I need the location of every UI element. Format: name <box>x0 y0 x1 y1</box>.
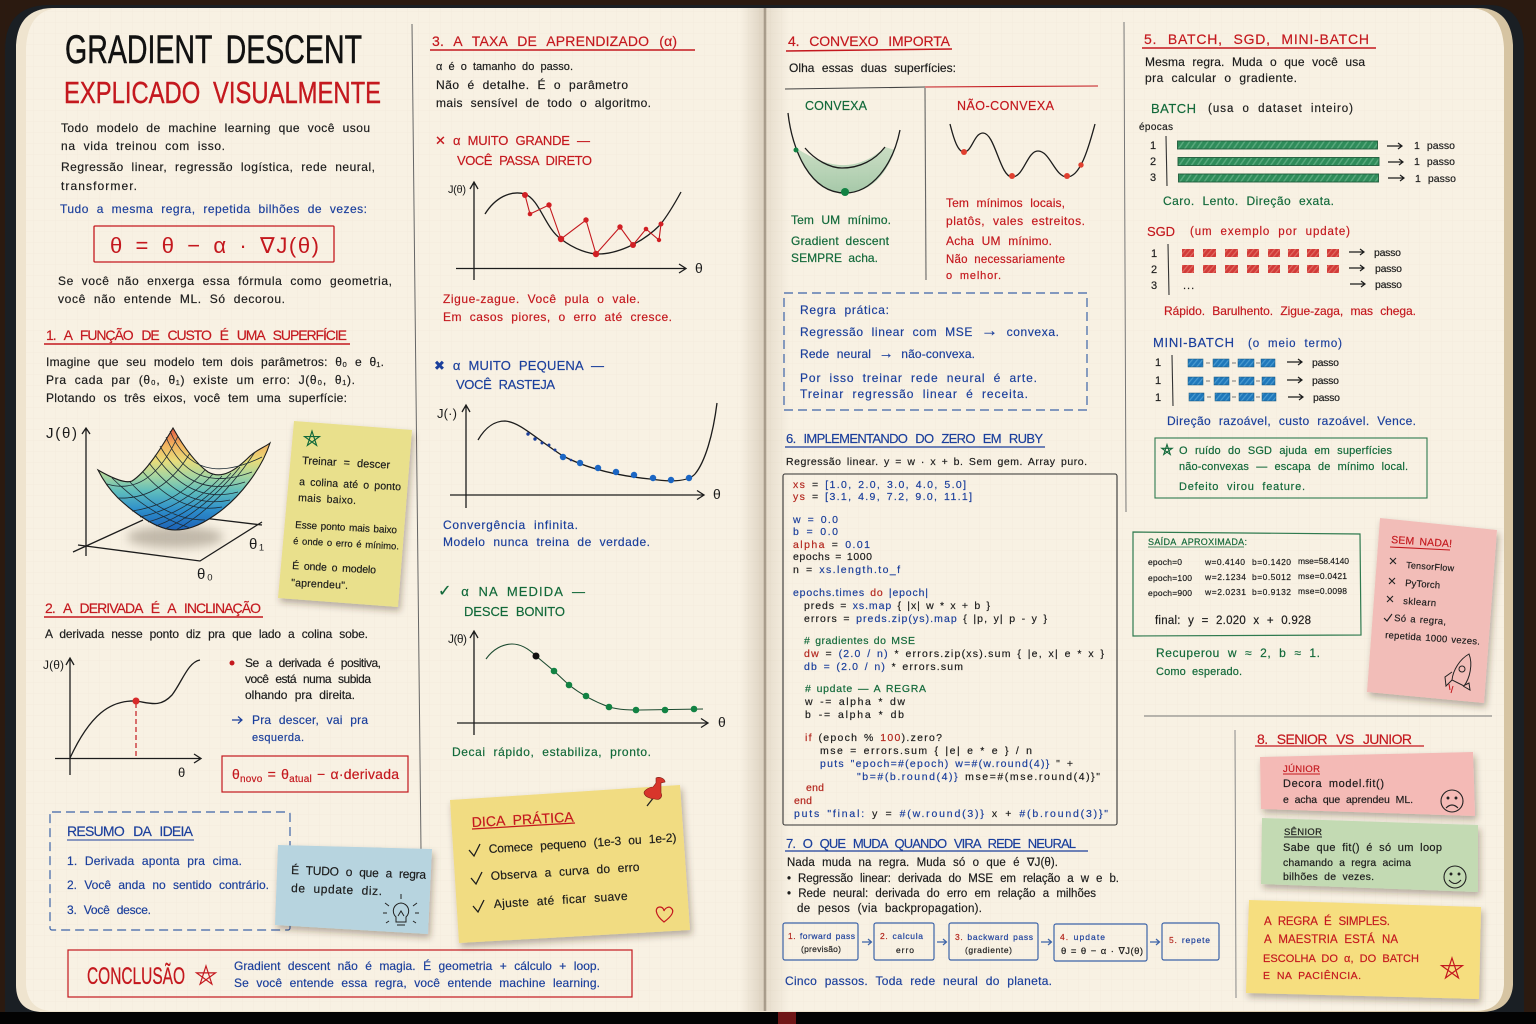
code block: b -= alpha * db <box>805 709 904 721</box>
card: sênior: Sabe que fit() é só um loop <box>1283 842 1442 854</box>
saída caption: Como esperado. <box>1156 666 1242 678</box>
flow diagram: θ = θ − α · ∇J(θ) <box>1061 946 1143 957</box>
ribbon bookmark <box>778 1012 796 1024</box>
intro text: transformer. <box>61 179 137 193</box>
panel: sgd <box>1147 224 1416 318</box>
icon: lightbulb <box>383 894 419 925</box>
derivative formula box: θ <box>232 766 240 782</box>
chart: alfa grande: θ <box>695 260 703 276</box>
section 5 intro <box>1145 55 1365 85</box>
panel: resumo: 3. Você desce. <box>67 903 151 917</box>
panel: saída aproximada: epoch=900 <box>1148 588 1192 598</box>
panel: não-convexa: Não necessariamente <box>946 254 1065 266</box>
derivative bullets: esquerda. <box>252 732 304 744</box>
panel: convexa: Tem UM mínimo. <box>791 213 891 227</box>
intro text: Todo modelo de machine learning que você usou <box>61 121 370 135</box>
code block: errors = preds.zip(ys).map { |p, y| p - y } <box>804 613 1047 625</box>
panel: regra prática: Treinar regressão linear é receita. <box>800 387 1028 401</box>
callout: regra simples: A MAESTRIA ESTÁ NA <box>1264 933 1398 946</box>
sticky note: sem nada <box>1367 518 1497 703</box>
flow diagram: (gradiente) <box>965 945 1012 955</box>
icon: rocket <box>1445 654 1471 693</box>
panel: sgd: SGD <box>1147 224 1175 239</box>
section 1 text: Pra cada par (θ₀, θ₁) existe um erro: J(θ₀, θ₁). <box>46 373 355 387</box>
section 3 text: Não é detalhe. É o parâmetro <box>436 77 628 92</box>
alfa pequena text: Convergência infinita. <box>443 518 578 532</box>
code block: epochs.times do |epoch| <box>793 587 928 599</box>
flow diagram: 3. backward pass <box>955 932 1033 942</box>
panel: mini-batch: 1 <box>1155 392 1161 404</box>
panel: convexa: Gradient descent <box>791 234 890 248</box>
flow diagram: (previsão) <box>801 944 841 954</box>
panel: batch: 1 passo <box>1414 140 1455 152</box>
code block: w = 0.0 <box>792 514 838 526</box>
code block: epochs = 1000 <box>793 551 872 563</box>
panel: sgd: passo <box>1375 279 1402 291</box>
geometry text: Se você não enxerga essa fórmula como geometria, <box>58 274 392 288</box>
chart: alfa pequena: J(·) <box>437 406 457 421</box>
panel: mini-batch: passo <box>1313 392 1340 404</box>
chart: cost surface <box>46 425 270 583</box>
panel: saída aproximada: b=0.1420 <box>1252 557 1291 567</box>
section 5 intro: Mesma regra. Muda o que você usa <box>1145 55 1365 69</box>
sticky note: treinar: mais baixo. <box>298 492 356 507</box>
chart: cost surface: θ₁ <box>249 536 264 553</box>
code block: db = (2.0 / n) * errors.sum <box>804 661 963 673</box>
section 7 text: • Regressão linear: derivada do MSE em relação a w e b. <box>787 873 1119 885</box>
chart: alfa pequena <box>437 403 721 508</box>
intro text: Regressão linear, regressão logística, rede neural, <box>61 160 375 174</box>
heading: alfa grande: ✕ α MUITO GRANDE — <box>435 133 590 148</box>
sticky note: dica prática <box>450 777 690 943</box>
surface mesh <box>98 428 270 530</box>
code block: "b=#(b.round(4)} mse=#(mse.round(4)}" <box>857 771 1100 783</box>
panel: mini-batch: passo <box>1312 357 1339 369</box>
chart: alfa na medida: J(θ) <box>448 632 467 646</box>
chart: cost surface: J(θ) <box>46 425 77 442</box>
panel: sgd: 2 <box>1151 264 1157 276</box>
intro text: na vida treinou com isso. <box>61 139 225 153</box>
panel: não-convexa: o melhor. <box>946 270 1001 282</box>
icon: star <box>305 431 319 445</box>
chart: alfa na medida <box>448 631 726 735</box>
sticky note: update: É TUDO o que a regra <box>291 862 427 882</box>
sticky note: sem nada: sklearn <box>1403 596 1436 609</box>
section 7 text: • Rede neural: derivada do erro em relação a milhões <box>787 888 1096 900</box>
panel: sgd: 3 <box>1151 280 1157 292</box>
sticky note: sem nada: repetida 1000 vezes. <box>1385 630 1480 648</box>
code block: # gradientes do MSE <box>804 635 915 647</box>
card: júnior: e acha que aprendeu ML. <box>1283 794 1413 806</box>
panel: conclusão: Gradient descent não é magia. É geometria + cálculo + loop. <box>234 958 600 973</box>
panel: resumo: 2. Você anda no sentido contrário. <box>67 878 269 892</box>
derivative bullets: Se a derivada é positiva, <box>245 656 381 670</box>
card: sênior: bilhões de vezes. <box>1283 871 1374 883</box>
callout: ruído: Defeito virou feature. <box>1179 481 1305 493</box>
flow diagram: erro <box>896 945 914 955</box>
flow diagram: 5. repete <box>1169 935 1210 945</box>
code block: end <box>794 795 812 807</box>
sticky note: sem nada: TensorFlow <box>1406 560 1455 573</box>
panel: regra prática: Regra prática: <box>800 303 889 317</box>
panel: saída aproximada: b=0.9132 <box>1252 587 1291 597</box>
panel: saída aproximada: epoch=100 <box>1148 573 1192 583</box>
derivative bullets: você está numa subida <box>245 672 371 686</box>
panel: mini-batch: passo <box>1312 375 1339 387</box>
heading 2: 2. A DERIVADA É A INCLINAÇÃO <box>45 600 261 616</box>
heading: alfa pequena: VOCÊ RASTEJA <box>456 377 555 392</box>
sticky note: dica prática: DICA PRÁTICA <box>471 809 575 830</box>
panel: sgd: (um exemplo por update) <box>1190 226 1350 238</box>
callout: regra simples: A REGRA É SIMPLES. <box>1264 915 1390 928</box>
code block: w -= alpha * dw <box>804 696 905 708</box>
heading 5: 5. BATCH, SGD, MINI-BATCH <box>1144 31 1369 47</box>
sticky note: treinar <box>278 421 412 607</box>
callout: regra simples: E NA PACIÊNCIA. <box>1263 969 1361 982</box>
heading 4: 4. CONVEXO IMPORTA <box>788 33 951 49</box>
panel: mini-batch: 1 <box>1155 375 1161 387</box>
callout: ruído: não-convexas — escapa de mínimo local. <box>1179 461 1408 473</box>
panel: resumo: RESUMO DA IDEIA <box>67 823 194 839</box>
panel: regra prática <box>784 293 1087 410</box>
panel: sgd: passo <box>1374 247 1401 259</box>
section 7 text <box>787 857 1119 915</box>
card: sênior <box>1261 818 1478 892</box>
panel: batch: 3 <box>1150 172 1156 184</box>
panel: saída aproximada: final: y = 2.020 x + 0.928 <box>1155 615 1311 627</box>
chart: derivative: J(θ) <box>43 658 64 672</box>
title: GRADIENT DESCENT <box>65 28 362 72</box>
flow diagram: 4. update <box>1060 932 1105 942</box>
derivative formula box: = θ <box>263 766 289 782</box>
alfa grande text <box>443 292 672 324</box>
panel: sgd: ... <box>1183 280 1195 292</box>
code block: puts "final: y = #(w.round(3)} x + #(b.round(3)}" <box>794 808 1108 820</box>
saída caption <box>1156 646 1320 678</box>
derivative bullets: Pra descer, vai pra <box>252 713 368 727</box>
alfa pequena text: Modelo nunca treina de verdade. <box>443 535 650 549</box>
flow diagram <box>783 923 1219 961</box>
chart: non-convex <box>950 124 1095 179</box>
card: júnior: JÚNIOR <box>1283 764 1320 775</box>
section 1 text: Imagine que seu modelo tem dois parâmetros: θ₀ e θ₁. <box>46 355 384 369</box>
heading: alfa pequena <box>434 358 604 392</box>
card: júnior: Decora model.fit() <box>1283 778 1384 790</box>
panel: batch: 2 <box>1150 156 1156 168</box>
panel: não-convexa: Acha UM mínimo. <box>946 234 1052 248</box>
icon: push pin <box>644 777 665 806</box>
chart: alfa grande <box>448 182 703 280</box>
panel: batch: 1 <box>1150 140 1156 152</box>
derivative formula box: atual <box>289 774 312 785</box>
section 1 text <box>46 355 384 405</box>
panel: resumo: 1. Derivada aponta pra cima. <box>67 854 242 868</box>
panel: conclusão <box>68 950 632 997</box>
chart: convex <box>788 113 900 196</box>
panel: saída aproximada: mse=58.4140 <box>1298 556 1349 566</box>
sticky note: dica prática: Ajuste até ficar suave <box>493 889 628 911</box>
code block: xs = [1.0, 2.0, 3.0, 4.0, 5.0] <box>793 479 966 491</box>
panel: mini-batch: 1 <box>1155 357 1161 369</box>
sticky note: dica prática: Comece pequeno (1e-3 ou 1e-2) <box>488 831 677 856</box>
panel: saída aproximada: mse=0.0421 <box>1298 571 1347 581</box>
heading: alfa grande: VOCÊ PASSA DIRETO <box>457 153 592 168</box>
heading: alfa na medida: DESCE BONITO <box>464 604 565 619</box>
icon: star <box>196 966 216 984</box>
section 4 intro: Olha essas duas superfícies: <box>789 61 956 75</box>
panel: não-convexa <box>946 99 1095 282</box>
derivative formula box: − α·derivada <box>312 766 399 782</box>
title <box>64 28 381 110</box>
formula box <box>94 226 334 262</box>
panel: saída aproximada: epoch=0 <box>1148 557 1182 567</box>
panel: conclusão: CONCLUSÃO <box>87 963 185 990</box>
panel: batch: 1 passo <box>1414 156 1455 168</box>
intro text: Tudo a mesma regra, repetida bilhões de vezes: <box>60 202 367 216</box>
panel: resumo <box>50 812 290 930</box>
chart: derivative <box>43 658 201 780</box>
card: sênior: chamando a regra acima <box>1283 857 1411 869</box>
panel: não-convexa: platôs, vales estreitos. <box>946 214 1085 228</box>
sticky note: update <box>275 845 432 934</box>
formula box: θ = θ − α · ∇J(θ) <box>110 233 319 258</box>
sticky note: treinar: Esse ponto mais baixo <box>295 520 398 536</box>
derivative bullets <box>230 656 381 744</box>
callout: ruído <box>1155 438 1427 498</box>
chart: cost surface: θ₀ <box>197 566 213 583</box>
panel: batch <box>1139 101 1456 208</box>
panel: sgd: 1 <box>1151 248 1157 260</box>
icon: sad face <box>1441 790 1463 812</box>
flow diagram: 1. forward pass <box>788 931 855 941</box>
section 6 intro: Regressão linear. y = w · x + b. Sem gem. Array puro. <box>786 456 1087 468</box>
saída caption: Recuperou w ≈ 2, b ≈ 1. <box>1156 646 1320 660</box>
chart: alfa grande: J(θ) <box>448 184 466 196</box>
panel: saída aproximada: w=2.1234 <box>1204 572 1246 582</box>
sticky note: dica prática: Observa a curva do erro <box>490 860 640 883</box>
section 7 text: Nada muda na regra. Muda só o que é ∇J(θ). <box>787 857 1058 869</box>
flow diagram: 2. calcula <box>880 931 923 941</box>
sticky note: treinar: é onde o erro é mínimo. <box>293 536 399 553</box>
section 5 intro: pra calcular o gradiente. <box>1145 71 1297 85</box>
heading: alfa na medida: ✓ α NA MEDIDA — <box>438 583 585 600</box>
sticky note: treinar: Treinar = descer <box>302 455 391 472</box>
panel: saída aproximada: b=0.5012 <box>1252 572 1291 582</box>
derivative formula box <box>222 756 408 792</box>
panel: batch: BATCH <box>1151 101 1196 116</box>
code block <box>783 474 1117 825</box>
sticky note: sem nada: PyTorch <box>1405 578 1440 591</box>
section 3 text: α é o tamanho do passo. <box>436 61 573 73</box>
code block: puts "epoch=#(epoch) w=#(w.round(4)} " + <box>820 758 1073 770</box>
heading 7: 7. O QUE MUDA QUANDO VIRA REDE NEURAL <box>786 836 1076 851</box>
title: EXPLICADO VISUALMENTE <box>64 75 381 110</box>
code block: b = 0.0 <box>793 526 838 538</box>
panel: convexa: CONVEXA <box>805 99 868 113</box>
panel: mini-batch: MINI-BATCH <box>1153 335 1234 350</box>
geometry text <box>58 274 392 306</box>
sticky note: treinar: a colina até o ponto <box>299 476 401 493</box>
panel: conclusão: Se você entende essa regra, você entende machine learning. <box>234 976 600 990</box>
heading: alfa grande <box>435 133 592 168</box>
heading 3: 3. A TAXA DE APRENDIZADO (α) <box>432 33 677 49</box>
derivative formula box: novo <box>240 774 263 785</box>
code block: if (epoch % 100).zero? <box>805 732 942 744</box>
section 3 text: mais sensível de todo o algoritmo. <box>436 96 651 110</box>
code block: preds = xs.map { |x| w * x + b } <box>804 600 990 612</box>
icon: star <box>1162 444 1172 454</box>
chart: derivative: θ <box>178 765 185 780</box>
sticky note: sem nada: Só a regra, <box>1394 613 1446 628</box>
icon: heart <box>656 907 673 922</box>
code block: end <box>806 782 824 794</box>
panel: regra prática: Rede neural → não-convexa. <box>800 345 975 362</box>
panel: sgd: passo <box>1375 263 1402 275</box>
panel: mini-batch: Direção razoável, custo razoável. Vence. <box>1167 414 1416 428</box>
panel: não-convexa: NÃO-CONVEXA <box>957 99 1055 113</box>
heading 1: 1. A FUNÇÃO DE CUSTO É UMA SUPERFÍCIE <box>46 327 347 343</box>
panel: saída aproximada: w=0.4140 <box>1204 557 1245 567</box>
heading: alfa na medida <box>438 583 585 619</box>
chart: alfa na medida: θ <box>718 714 726 730</box>
panel: não-convexa: Tem mínimos locais, <box>946 196 1065 210</box>
chart: alfa pequena: θ <box>713 486 721 502</box>
heading: alfa pequena: ✖ α MUITO PEQUENA — <box>434 358 604 373</box>
panel: batch: Caro. Lento. Direção exata. <box>1163 194 1334 208</box>
section 2 text: A derivada nesse ponto diz pra que lado a colina sobe. <box>45 627 368 641</box>
section 3 text <box>436 61 651 110</box>
panel: mini-batch <box>1153 335 1416 428</box>
code block: # update — A REGRA <box>805 683 926 695</box>
panel: batch: (usa o dataset inteiro) <box>1208 103 1353 115</box>
alfa grande text: Zigue-zague. Você pula o vale. <box>443 292 640 306</box>
panel: batch: 1 passo <box>1415 173 1456 185</box>
alfa na medida text: Decai rápido, estabiliza, pronto. <box>452 745 651 759</box>
flow caption: Cinco passos. Toda rede neural do planeta. <box>785 974 1052 988</box>
card: sênior: SÊNIOR <box>1284 827 1322 838</box>
sticky note: sem nada: SEM NADA! <box>1391 534 1452 550</box>
alfa pequena text <box>443 518 650 549</box>
code block: mse = errors.sum { |e| e * e } / n <box>820 745 1032 757</box>
geometry text: você não entende ML. Só decorou. <box>58 292 285 306</box>
panel: regra prática: Por isso treinar rede neural é arte. <box>800 371 1037 385</box>
panel: saída aproximada: mse=0.0098 <box>1298 586 1347 596</box>
sticky note: treinar: "aprendeu". <box>291 577 348 592</box>
sticky note: update: de update diz. <box>291 881 382 898</box>
code block: alpha = 0.01 <box>793 539 870 551</box>
sticky note: treinar: É onde o modelo <box>292 559 377 576</box>
callout: regra simples <box>1246 900 1481 999</box>
intro text <box>60 121 375 216</box>
section 1 text: Plotando os três eixos, você tem uma superfície: <box>46 391 347 405</box>
panel: convexa <box>788 99 900 265</box>
code block: dw = (2.0 / n) * errors.zip(xs).sum { |e, x| e * x } <box>804 648 1104 660</box>
derivative bullets: olhando pra direita. <box>245 688 355 702</box>
section 7 text: de pesos (via backpropagation). <box>797 903 982 915</box>
heading 6: 6. IMPLEMENTANDO DO ZERO EM RUBY <box>786 431 1043 446</box>
code block: ys = [3.1, 4.9, 7.2, 9.0, 11.1] <box>793 491 972 503</box>
icon: star <box>1442 958 1462 978</box>
panel: mini-batch: (o meio termo) <box>1248 338 1342 350</box>
panel: saída aproximada: SAÍDA APROXIMADA: <box>1148 537 1247 547</box>
alfa grande text: Em casos piores, o erro até cresce. <box>443 310 672 324</box>
icon: happy face <box>1444 866 1466 888</box>
panel: saída aproximada <box>1133 532 1361 636</box>
heading 8: 8. SENIOR VS JUNIOR <box>1257 731 1412 747</box>
panel: saída aproximada: w=2.0231 <box>1204 587 1246 597</box>
callout: ruído: O ruído do SGD ajuda em superfícies <box>1179 445 1392 457</box>
card: júnior <box>1260 752 1475 816</box>
panel: regra prática: Regressão linear com MSE → convexa. <box>800 321 1059 340</box>
callout: regra simples: ESCOLHA DO α, DO BATCH <box>1263 953 1419 965</box>
panel: sgd: Rápido. Barulhento. Zigue-zaga, mas chega. <box>1164 304 1416 318</box>
panel: convexa: SEMPRE acha. <box>791 251 878 265</box>
code block: n = xs.length.to_f <box>793 564 900 576</box>
panel: batch: épocas <box>1139 122 1173 133</box>
